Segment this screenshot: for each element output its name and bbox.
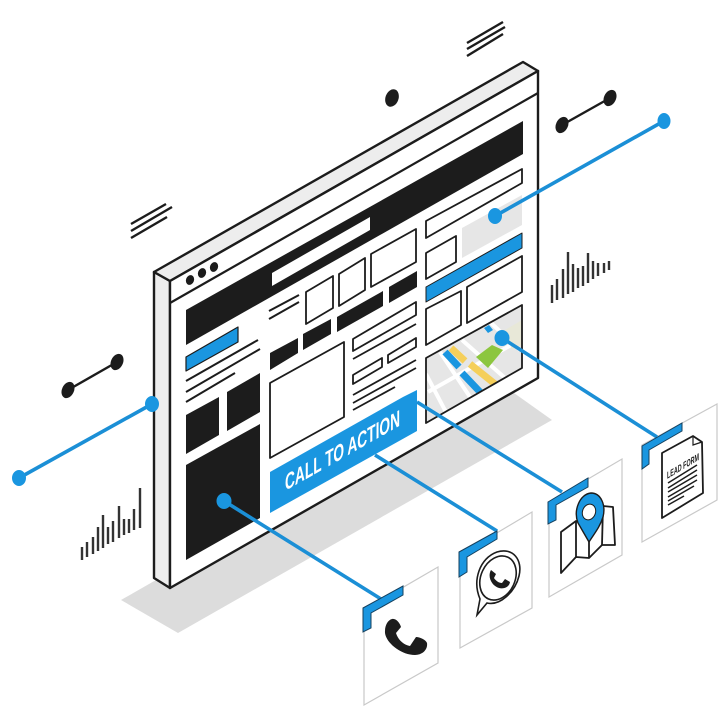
card outline bbox=[460, 512, 532, 648]
decoration: bar sparkline right bbox=[552, 252, 609, 303]
call to action button bbox=[270, 390, 417, 513]
decoration: three lines left bbox=[131, 204, 172, 238]
card tab bbox=[459, 531, 497, 577]
card outline bbox=[364, 567, 438, 705]
right column blue bar bbox=[426, 233, 522, 302]
decoration: dumbbell left bbox=[59, 352, 126, 400]
connector: grey image to top right bbox=[488, 113, 670, 224]
right column small box bbox=[426, 236, 456, 279]
phone card bbox=[216, 493, 438, 705]
connector: panel edge to left bbox=[12, 396, 159, 486]
right column grey image bbox=[462, 195, 522, 258]
decoration: dumbbell top right bbox=[553, 88, 619, 135]
left column text lines bbox=[186, 340, 260, 402]
icon: chat bubble with phone bbox=[473, 550, 523, 615]
decoration: three lines top bbox=[467, 22, 505, 56]
connector to map card bbox=[417, 402, 562, 492]
card outline bbox=[642, 404, 717, 542]
middle row boxes bbox=[306, 229, 416, 324]
chat card bbox=[375, 455, 532, 648]
card tab bbox=[642, 423, 682, 469]
panel side and top faces bbox=[154, 62, 538, 588]
browser title bar bbox=[170, 93, 538, 303]
connector to chat card bbox=[375, 455, 497, 531]
browser window panel bbox=[154, 62, 538, 588]
middle row black tabs bbox=[270, 271, 417, 370]
panel front face bbox=[170, 71, 538, 588]
right column input box bbox=[426, 169, 522, 238]
right column lower boxes bbox=[426, 256, 522, 345]
card outline bbox=[549, 459, 622, 597]
card tab bbox=[548, 478, 588, 524]
lead form card bbox=[494, 330, 717, 542]
call to action button: CALL TO ACTION bbox=[285, 406, 400, 497]
header bar with search field bbox=[186, 121, 523, 345]
map card bbox=[417, 402, 622, 597]
card tab bbox=[363, 586, 403, 632]
left column blue button bbox=[186, 327, 238, 371]
large image box bbox=[270, 342, 344, 458]
decoration: dot bbox=[383, 87, 401, 109]
icon: phone handset bbox=[385, 619, 427, 655]
short text lines bbox=[269, 295, 299, 319]
icon: folded map with pin bbox=[561, 493, 615, 573]
connector to lead form card, starting on map pin bbox=[494, 330, 657, 437]
left column black blocks bbox=[186, 373, 260, 560]
ground shadow bbox=[121, 383, 552, 633]
connector to phone card bbox=[216, 493, 381, 599]
text block with boxes bbox=[353, 302, 416, 410]
icon: lead form document bbox=[662, 436, 703, 518]
decoration: bar sparkline left bbox=[82, 488, 140, 560]
map thumbnail bbox=[426, 305, 522, 423]
